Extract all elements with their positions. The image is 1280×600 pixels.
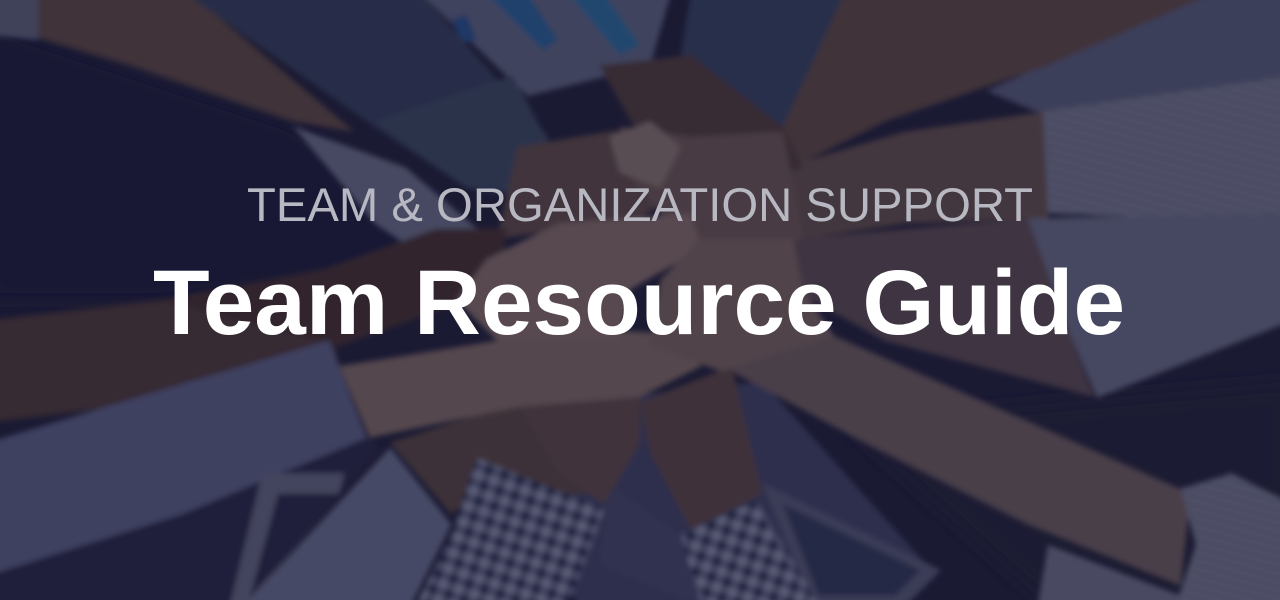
bottom-right sweater xyxy=(1176,473,1280,600)
top-left arm xyxy=(0,0,354,132)
tablet outline xyxy=(230,473,344,600)
top-center denim xyxy=(676,0,849,132)
white cuff left xyxy=(293,127,477,264)
top-right papers xyxy=(987,0,1280,116)
checkered sleeves xyxy=(416,458,604,600)
title: Team Resource Guide xyxy=(153,252,1125,354)
top chart paper xyxy=(421,0,671,96)
bottom-right arm xyxy=(722,336,1191,586)
right sweater xyxy=(1043,76,1280,223)
lower arms xyxy=(390,402,599,514)
right arm xyxy=(783,111,1048,239)
center back hands xyxy=(599,55,803,198)
main front hands xyxy=(339,331,701,438)
top-left denim xyxy=(186,0,548,198)
left white sleeve xyxy=(0,341,367,575)
top-right arm xyxy=(783,0,1211,167)
left arm xyxy=(0,300,339,422)
bottom papers xyxy=(487,382,936,600)
subtitle: TEAM & ORGANIZATION SUPPORT xyxy=(247,178,1033,231)
lower white cuff xyxy=(242,448,451,600)
right paper xyxy=(1028,213,1280,398)
